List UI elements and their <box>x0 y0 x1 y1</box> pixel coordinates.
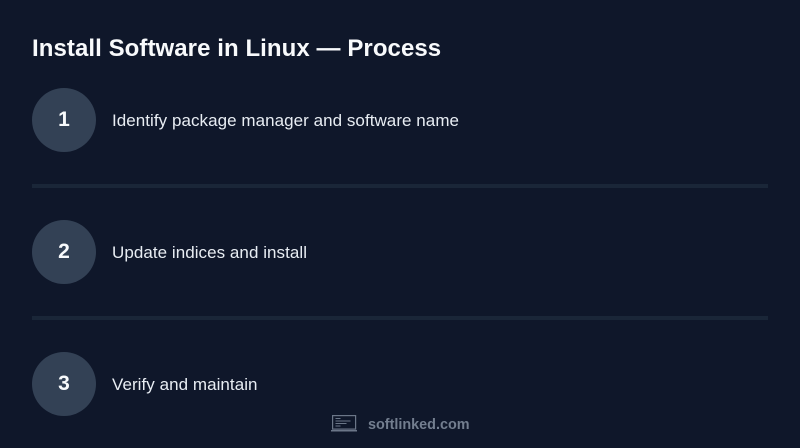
step 3 number badge <box>32 352 96 416</box>
step 3 number badge: 3 <box>58 372 70 395</box>
title: Install Software in Linux — Process <box>32 35 441 62</box>
step 2 number badge <box>32 220 96 284</box>
step 2 label: Update indices and install <box>112 243 307 262</box>
step 2 number badge: 2 <box>58 240 70 263</box>
step 2 <box>32 220 307 284</box>
footer brand <box>331 415 470 433</box>
step 3 <box>32 352 258 416</box>
footer text: softlinked.com <box>368 417 470 433</box>
step 1 label: Identify package manager and software name <box>112 111 459 130</box>
step 3 label: Verify and maintain <box>112 375 258 394</box>
step 1 <box>32 88 459 152</box>
icon: laptop <box>331 415 357 432</box>
step 1 number badge <box>32 88 96 152</box>
step 1 number badge: 1 <box>58 108 70 131</box>
